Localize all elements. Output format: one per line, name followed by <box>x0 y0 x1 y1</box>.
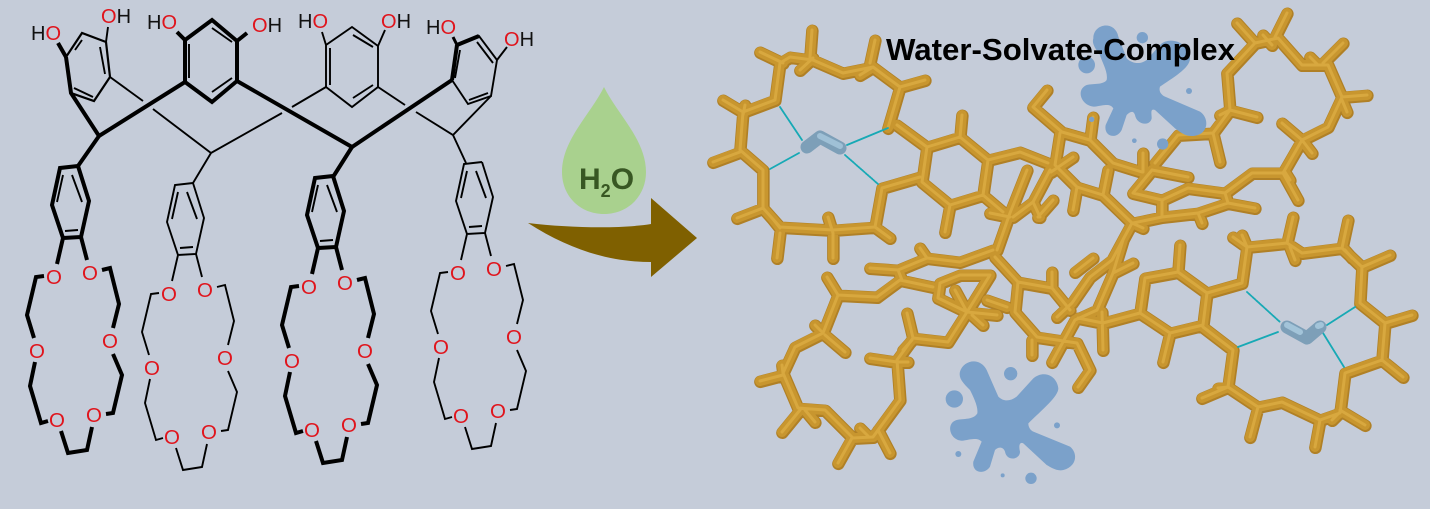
hydroxyl labels: OH <box>101 6 131 28</box>
crown ether arm 3: O <box>284 350 300 373</box>
crown ether arm 3: O <box>357 340 373 363</box>
hydroxyl labels: HO <box>298 11 328 33</box>
crown ether arm 2: O <box>161 283 177 306</box>
crown ether arm 4: O <box>453 405 469 428</box>
crown ether arm 2: O <box>201 421 217 444</box>
crown ether arm 2: O <box>164 426 180 449</box>
water molecule: right <box>1287 325 1321 338</box>
crown ether arm 3: O <box>341 414 357 437</box>
bold macrocycle bonds and resorcinol rings <box>58 20 479 177</box>
icon: water drop with H2O label: H <box>579 163 601 196</box>
icon: water drop with H2O label <box>562 87 646 214</box>
crown ether arm 2: O <box>144 357 160 380</box>
crown ether arm 3 <box>282 176 377 463</box>
crown ether arm 4: O <box>450 262 466 285</box>
splash: lower water stain <box>946 361 1075 484</box>
crown ether arm 4: O <box>433 336 449 359</box>
crown ether arm 4 <box>431 162 526 449</box>
chemical structure: resorcinarene crown ether <box>27 6 534 470</box>
hydroxyl labels <box>31 6 534 51</box>
splash: upper water stain <box>1078 26 1206 150</box>
crown ether arm 1: O <box>49 409 65 432</box>
crown ether arm 1: O <box>46 266 62 289</box>
hydroxyl labels: OH <box>504 29 534 51</box>
crown ether arm 4: O <box>486 258 502 281</box>
crown ether arm 1: O <box>29 340 45 363</box>
title: Water-Solvate-Complex <box>886 32 1236 67</box>
hydroxyl labels: HO <box>426 17 456 39</box>
hydroxyl labels: OH <box>252 15 282 37</box>
arrow: reaction direction <box>528 198 697 277</box>
crystal structure: water-solvate complex molecule <box>713 13 1412 464</box>
crown ether arm 4: O <box>490 400 506 423</box>
crown ether arm 1: O <box>82 262 98 285</box>
crown ether arm 3: O <box>301 276 317 299</box>
hydrogen bonds: right water <box>1238 292 1355 367</box>
crown ether arm 3: O <box>337 272 353 295</box>
hydroxyl labels: HO <box>147 12 177 34</box>
crown ether arm 2: O <box>197 279 213 302</box>
icon: water drop with H2O label: O <box>611 163 634 196</box>
crown ether arm 2: O <box>217 347 233 370</box>
crown ether arm 1 <box>27 166 122 453</box>
crown ether arm 1: O <box>102 330 118 353</box>
crown ether arm 3: O <box>304 419 320 442</box>
crown ether arm 1: O <box>86 404 102 427</box>
crown ether arm 2 <box>142 183 237 470</box>
hydroxyl labels: OH <box>381 11 411 33</box>
crown ether arm 4: O <box>506 326 522 349</box>
thin bonds <box>74 27 507 183</box>
icon: water drop with H2O label: 2 <box>601 181 611 201</box>
hydrogen bonds: left water <box>770 107 888 184</box>
hydroxyl labels: HO <box>31 23 61 45</box>
water molecule: left <box>807 136 840 148</box>
